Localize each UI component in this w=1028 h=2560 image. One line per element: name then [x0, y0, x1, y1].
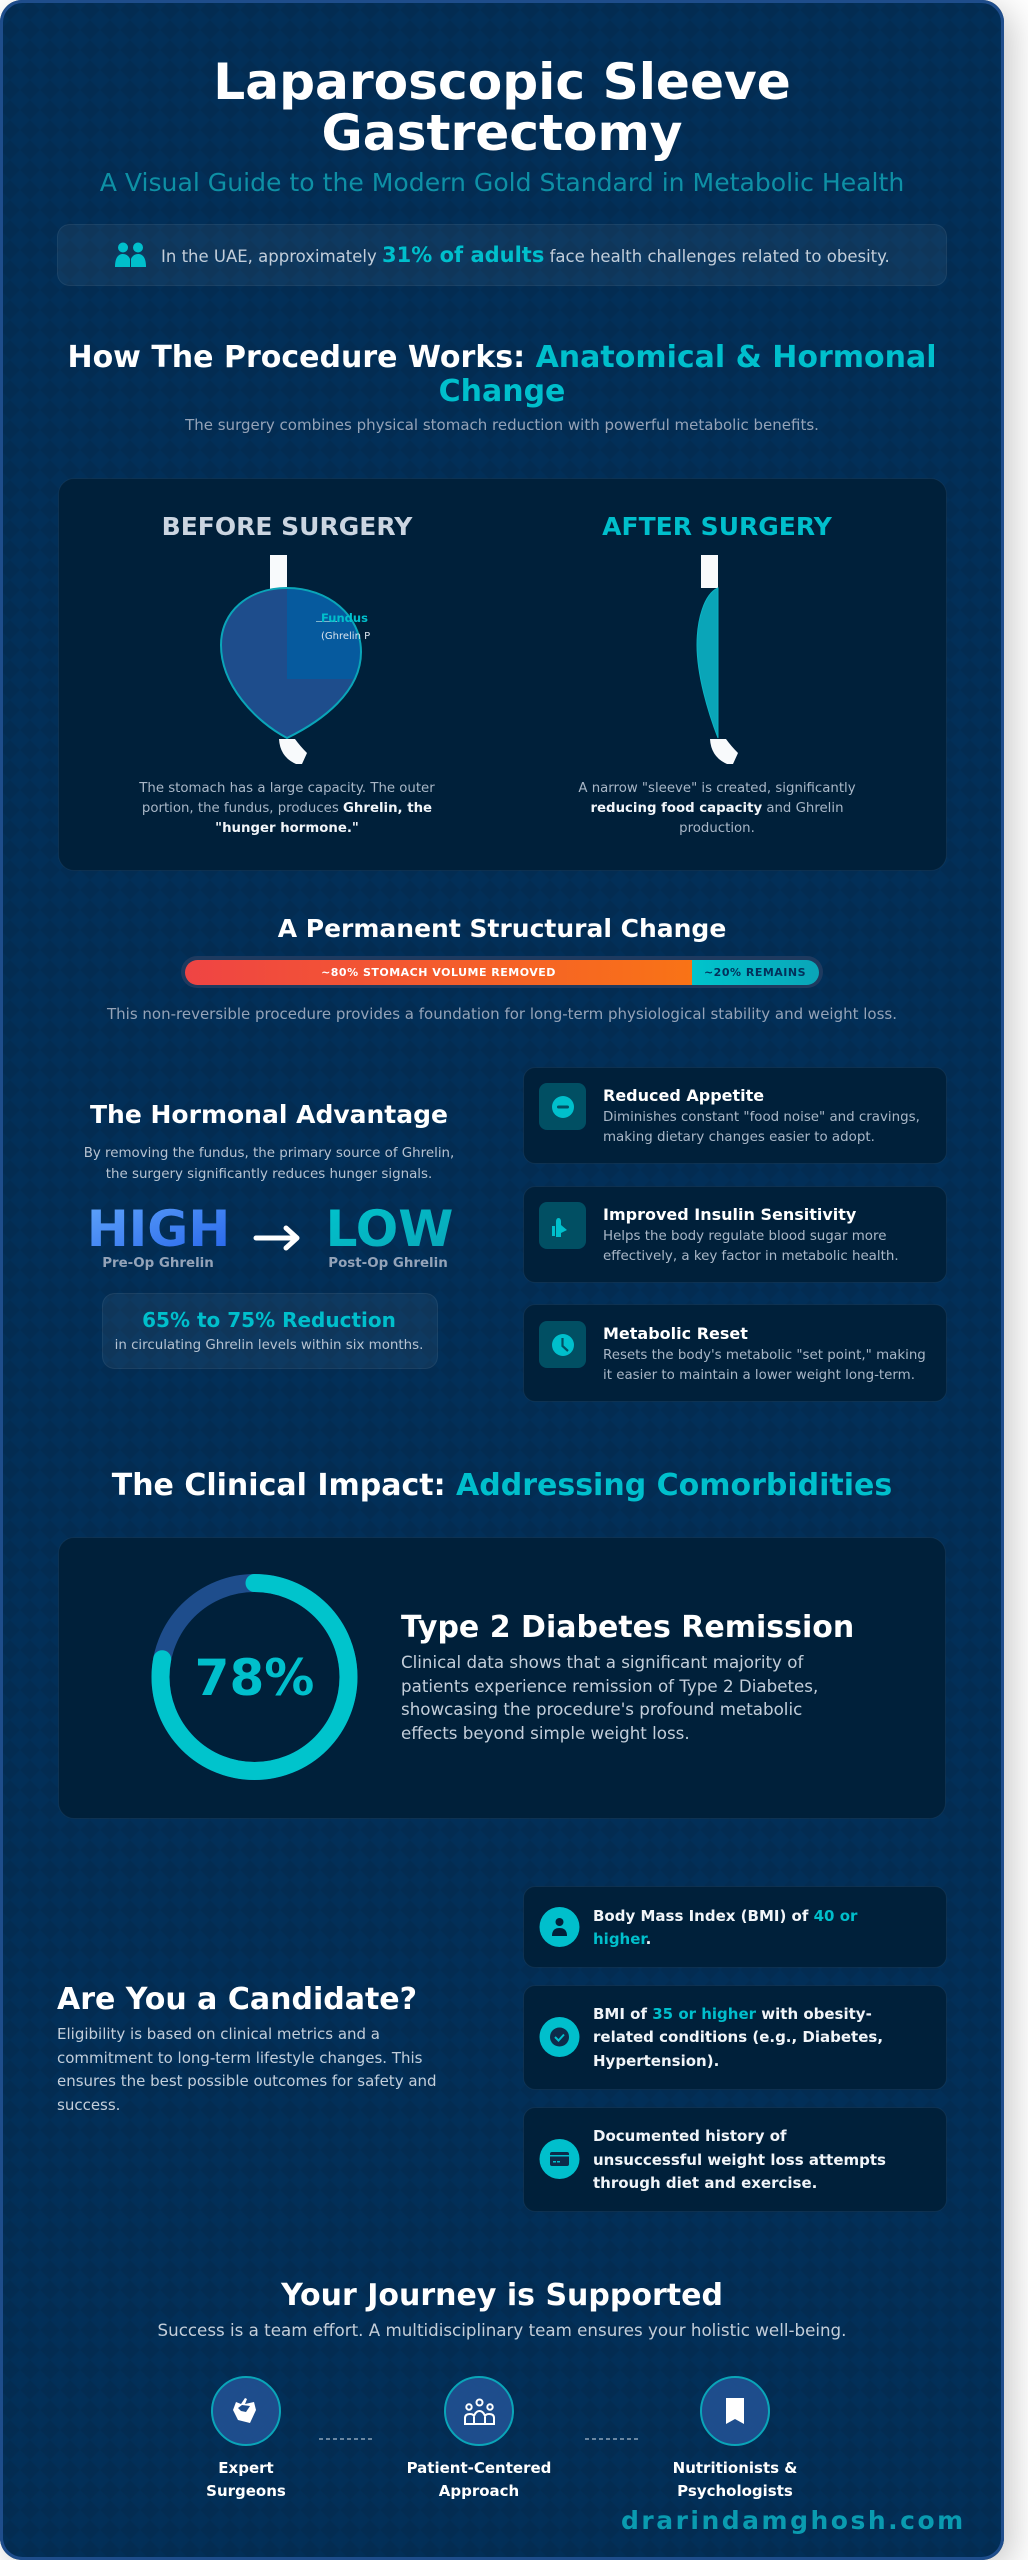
card: bmi 40: Body Mass Index (BMI) of 40 or: [593, 1907, 858, 1925]
card: reduced appetite: making dietary changes easier to adopt.: [603, 1130, 875, 1145]
section heading: how the procedure works: [67, 340, 937, 409]
card: metabolic reset: it easier to maintain a lower weight long-term.: [603, 1368, 915, 1383]
connector: [319, 2438, 373, 2440]
icon: insulin: [539, 1202, 586, 1249]
card: improved insulin sensitivity: Helps the body regulate blood sugar more: [603, 1229, 886, 1244]
bar caption: This non-reversible procedure provides a foundation for long-term physiological stability and weight loss.: [106, 1005, 897, 1023]
subtitle: A Visual Guide to the Modern Gold Standard in Metabolic Health: [100, 168, 904, 197]
card: bmi 40: [524, 1886, 946, 1968]
stat banner: [58, 224, 946, 286]
reduction callout: 65% to 75% Reduction: [142, 1308, 396, 1332]
high ghrelin: HIGH: [87, 1200, 230, 1258]
high ghrelin: Pre-Op Ghrelin: [102, 1256, 214, 1271]
after description: reducing food capacity and Ghrelin: [590, 801, 844, 816]
low ghrelin: Post-Op Ghrelin: [328, 1256, 448, 1271]
team: patient-centered approach: Patient-Centered: [407, 2459, 551, 2477]
candidate intro: commitment to long-term lifestyle changes. This: [57, 2049, 423, 2067]
icon: people: [115, 242, 146, 267]
card: bmi 35: related conditions (e.g., Diabetes,: [593, 2028, 883, 2046]
remission description: Clinical data shows that a significant majority of: [401, 1652, 804, 1672]
stomach diagram: before: [220, 555, 370, 764]
candidate intro: [57, 1982, 437, 2114]
donut chart: 78%: 78%: [195, 1649, 314, 1707]
panel: type 2 diabetes remission: Type 2 Diabetes Remission: [401, 1610, 854, 1645]
after description: production.: [679, 821, 755, 836]
icon: card: [540, 2139, 580, 2179]
team: expert surgeons: Expert: [218, 2459, 274, 2477]
section subtitle: The surgery combines physical stomach reduction with powerful metabolic benefits.: [184, 416, 819, 434]
website watermark: drarindamghosh.com: [621, 2506, 966, 2535]
before description: [138, 781, 435, 836]
remission description: patients experience remission of Type 2 Diabetes,: [401, 1676, 818, 1696]
icon: clock: [539, 1321, 586, 1368]
remission description: effects beyond simple weight loss.: [401, 1723, 690, 1743]
card: improved insulin sensitivity: [524, 1186, 946, 1282]
stat text: In the UAE, approximately 31% of adults face health challenges related to obesity.: [161, 243, 890, 267]
team: nutritionists and psychologists: [673, 2377, 797, 2500]
card: reduced appetite: Reduced Appetite: [603, 1086, 764, 1105]
progress bar: stomach volume: ~20% REMAINS: [704, 966, 806, 979]
section heading: how the procedure works: Change: [439, 374, 565, 409]
explanation: the surgery significantly reduces hunger signals.: [106, 1167, 432, 1182]
panel: before and after surgery: [58, 478, 946, 870]
title: Gastrectomy: [322, 103, 682, 162]
before description: portion, the fundus, produces Ghrelin, the: [142, 801, 432, 816]
card: bmi 35: [524, 1986, 946, 2090]
card: weight loss history: Documented history of: [593, 2127, 787, 2145]
candidate intro: Eligibility is based on clinical metrics and a: [57, 2025, 380, 2043]
team: expert surgeons: [206, 2377, 286, 2500]
title: Laparoscopic Sleeve: [213, 52, 791, 111]
heading: journey supported: Your Journey is Supported: [280, 2278, 723, 2313]
team: expert surgeons: Surgeons: [206, 2482, 286, 2500]
candidate intro: Are You a Candidate?: [57, 1982, 417, 2017]
card: improved insulin sensitivity: Improved Insulin Sensitivity: [603, 1205, 857, 1224]
connector: [585, 2438, 640, 2440]
after surgery column: AFTER SURGERY: [602, 512, 833, 541]
team: patient-centered approach: [407, 2377, 551, 2500]
low ghrelin: LOW: [326, 1200, 453, 1258]
explanation: [84, 1146, 454, 1182]
card: metabolic reset: [524, 1304, 946, 1402]
card: bmi 35: BMI of 35 or higher with obesity-: [593, 2005, 872, 2023]
card: weight loss history: through diet and exercise.: [593, 2174, 817, 2192]
after description: [578, 781, 856, 836]
candidate intro: success.: [57, 2096, 120, 2114]
icon: check badge: [540, 2017, 580, 2057]
after surgery column: [578, 512, 856, 836]
explanation: By removing the fundus, the primary source of Ghrelin,: [84, 1146, 454, 1161]
fundus label: Fundus: [321, 611, 368, 625]
before description: "hunger hormone.": [215, 821, 359, 836]
remission description: showcasing the procedure's profound metabolic: [401, 1699, 802, 1719]
panel: type 2 diabetes remission: [58, 1538, 946, 1818]
section heading: how the procedure works: How The Procedure Works: Anatomical & Hormonal: [67, 340, 937, 375]
team: nutritionists and psychologists: Psychologists: [677, 2482, 793, 2500]
candidate intro: ensures the best possible outcomes for safety and: [57, 2072, 437, 2090]
heading: clinical impact: The Clinical Impact: Addressing Comorbidities: [112, 1468, 892, 1503]
journey subtitle: Success is a team effort. A multidisciplinary team ensures your holistic well-being.: [158, 2320, 846, 2340]
icon: group: [445, 2377, 513, 2445]
card: weight loss history: unsuccessful weight loss attempts: [593, 2151, 886, 2169]
team: nutritionists and psychologists: Nutritionists &: [673, 2459, 797, 2477]
icon: minus circle: [539, 1083, 586, 1130]
before surgery column: BEFORE SURGERY: [162, 512, 413, 541]
reduction callout: in circulating Ghrelin levels within six months.: [115, 1338, 423, 1353]
fundus label: (Ghrelin Production): [321, 631, 421, 642]
panel: hormonal advantage: [84, 1100, 454, 1368]
after description: A narrow "sleeve" is created, significantly: [578, 781, 856, 796]
donut chart: 78%: [160, 1583, 348, 1771]
heading: permanent structural change: A Permanent Structural Change: [278, 914, 726, 943]
icon: surgeon: [212, 2377, 280, 2445]
remission description: [401, 1652, 818, 1743]
team: patient-centered approach: Approach: [439, 2482, 519, 2500]
stomach diagram: after: [697, 555, 738, 764]
card: weight loss history: [524, 2108, 946, 2212]
card: bmi 40: higher.: [593, 1930, 651, 1948]
card: metabolic reset: Metabolic Reset: [603, 1324, 748, 1343]
before description: The stomach has a large capacity. The outer: [138, 781, 435, 796]
fundus label: [316, 613, 370, 640]
progress bar: stomach volume: [181, 956, 823, 988]
arrow: [256, 1228, 297, 1248]
reduction callout: [102, 1294, 438, 1368]
title: [213, 52, 791, 162]
card: improved insulin sensitivity: effectively, a key factor in metabolic health.: [603, 1249, 899, 1264]
card: reduced appetite: Diminishes constant "food noise" and cravings,: [603, 1110, 920, 1125]
before surgery column: [138, 512, 435, 836]
card: bmi 35: Hypertension).: [593, 2052, 719, 2070]
icon: person: [540, 1907, 580, 1947]
icon: bookmark: [701, 2377, 769, 2445]
card: metabolic reset: Resets the body's metabolic "set point," making: [603, 1348, 926, 1363]
heading: The Hormonal Advantage: [90, 1100, 448, 1129]
progress bar: stomach volume: ~80% STOMACH VOLUME REMOVED: [321, 966, 556, 979]
card: reduced appetite: [524, 1068, 946, 1164]
